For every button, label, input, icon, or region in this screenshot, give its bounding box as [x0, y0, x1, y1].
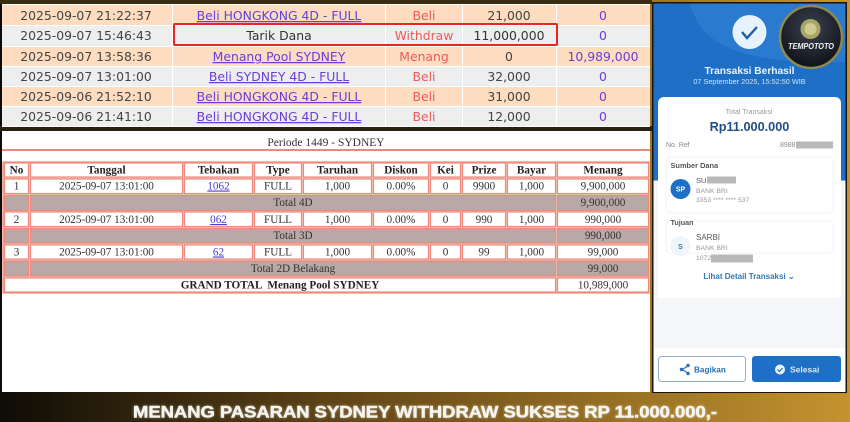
table row 2: 2025-09-07 13:01:00	[59, 214, 154, 226]
table header row: Taruhan	[317, 164, 359, 176]
text: total transaksi: Total Transaksi	[726, 109, 773, 116]
row: 13:58:36: Menang	[399, 49, 449, 64]
panel: bank receipt phone screen	[652, 2, 847, 393]
row: 15:46:43: 11,000,000	[474, 28, 545, 43]
row: 21:41:10: Beli HONGKONG 4D - FULL	[197, 109, 361, 124]
section: sumber dana: SP	[676, 186, 685, 194]
section: sumber dana: Sumber Dana	[670, 161, 719, 170]
table row 3: 0.00%	[387, 246, 415, 258]
section: sumber dana: 3353 **** **** 537	[696, 197, 750, 204]
table row 2: 0.00%	[387, 214, 415, 226]
table grid	[3, 162, 649, 293]
row: 21:52:10: 2025-09-06 21:52:10	[20, 89, 152, 104]
row: 21:52:10	[20, 89, 607, 104]
row: 15:46:43: 2025-09-07 15:46:43	[20, 28, 152, 43]
table header row: Tebakan	[198, 164, 240, 176]
table header row: Type	[266, 164, 290, 176]
table row 1: 2025-09-07 13:01:00	[59, 180, 154, 192]
table row 2: 062	[210, 214, 227, 226]
row: 21:22:37: 0	[599, 8, 607, 23]
table row 1: 9,900,000	[581, 180, 626, 192]
table row 3: 99	[478, 246, 490, 258]
section: tujuan: Tujuan	[670, 218, 694, 227]
table row 2: 990,000	[585, 214, 622, 226]
row: 13:58:36: Menang Pool SYDNEY	[213, 49, 346, 64]
table row 2: 0	[443, 214, 449, 226]
total 4D row: Total 4D	[273, 197, 313, 209]
row: 21:22:37: Beli HONGKONG 4D - FULL	[197, 8, 361, 23]
table row 1: 1	[14, 180, 19, 192]
link: lihat detail: Lihat Detail Transaksi ⌄	[703, 272, 795, 281]
total 3D row	[273, 230, 622, 242]
table row 1: 1,000	[325, 180, 350, 192]
footer bar	[654, 348, 846, 392]
button: selesai: Selesai	[790, 364, 819, 374]
banner caption: MENANG PASARAN SYDNEY WITHDRAW SUKSES RP 11.000.000,-	[133, 402, 717, 422]
row: 21:41:10: 12,000	[487, 109, 531, 124]
table row 1: 0	[443, 180, 449, 192]
text: date: 07 September 2025, 15:52:50 WIB	[693, 77, 806, 86]
row: 21:22:37	[20, 8, 607, 23]
heading: periode: Periode 1449 - SYDNEY	[267, 137, 385, 149]
panel: transaction history table	[2, 4, 650, 127]
table header row: Diskon	[384, 164, 419, 176]
button: bagikan	[658, 356, 746, 382]
section: tujuan: BANK BRI	[696, 245, 728, 252]
row: 21:22:37: Beli	[412, 8, 436, 23]
table row 3: 99,000	[588, 246, 619, 258]
button: bagikan: Bagikan	[694, 366, 726, 374]
table row 3: 0	[443, 246, 449, 258]
text: no ref: No. Ref	[666, 142, 690, 149]
table row 1: 9900	[473, 180, 496, 192]
text: no ref	[666, 142, 833, 149]
icon: success check	[732, 15, 766, 49]
row: 13:58:36: 10,989,000	[568, 49, 639, 64]
logo: tempototo badge	[780, 6, 842, 68]
total 4D row	[273, 197, 626, 209]
banner caption: MENANG PASARAN SYDNEY WITHDRAW SUKSES RP 11.000.000,-	[133, 402, 717, 422]
text: amount: Rp11.000.000	[710, 120, 789, 134]
logo: tempototo badge: TEMPOTOTO	[788, 42, 834, 51]
row: 21:41:10: 2025-09-06 21:41:10	[20, 109, 152, 124]
card: transaction details	[658, 97, 841, 298]
grand total row: 10,989,000	[578, 280, 629, 292]
row: 13:01:00: Beli	[412, 69, 436, 84]
table row 2: 1,000	[325, 214, 350, 226]
total 3D row: Total 3D	[273, 230, 313, 242]
row: 15:46:43: 0	[599, 28, 607, 43]
row: 21:41:10	[20, 109, 607, 124]
section: sumber dana: BANK BRI	[696, 188, 728, 195]
table row 3: 1,000	[325, 246, 350, 258]
total 2D row: Total 2D Belakang	[251, 263, 336, 275]
table row 3: 62	[213, 246, 224, 258]
table header row: Menang	[583, 164, 623, 176]
row: 21:41:10: Beli	[412, 109, 436, 124]
row: 13:58:36: 2025-09-07 13:58:36	[20, 49, 152, 64]
table row 2: 2	[14, 214, 19, 226]
row: 21:52:10: Beli	[412, 89, 436, 104]
table row 1: 0.00%	[387, 180, 415, 192]
total 3D row: 990,000	[585, 230, 622, 242]
row: 21:52:10: Beli HONGKONG 4D - FULL	[197, 89, 361, 104]
row: 15:46:43: Tarik Dana	[245, 28, 312, 43]
table row 1: 1,000	[519, 180, 544, 192]
row: 13:58:36: 0	[505, 49, 513, 64]
panel: periode detail table	[2, 131, 650, 392]
row: 13:01:00: 0	[599, 69, 607, 84]
row: 13:01:00: Beli SYDNEY 4D - FULL	[209, 69, 349, 84]
table header row: Prize	[472, 164, 496, 176]
table row 3: 2025-09-07 13:01:00	[59, 246, 154, 258]
total 2D row	[251, 263, 619, 275]
text: no ref: 8988	[780, 142, 796, 149]
section: tujuan: SARBI	[696, 233, 720, 242]
total 2D row: 99,000	[588, 263, 619, 275]
button: selesai	[752, 356, 841, 382]
row: 15:46:43	[20, 28, 607, 43]
table row 1: FULL	[264, 180, 292, 192]
total 4D row: 9,900,000	[581, 197, 626, 209]
table header row	[10, 164, 623, 176]
section: tujuan: 1072	[696, 255, 711, 262]
heading: transaksi berhasil: Transaksi Berhasil	[704, 66, 795, 77]
table header row: Kei	[437, 164, 454, 176]
table row 2: FULL	[264, 214, 292, 226]
section: tujuan	[666, 218, 833, 262]
row: 21:52:10: 0	[599, 89, 607, 104]
table row 3	[14, 246, 619, 258]
row: 13:01:00	[20, 69, 607, 84]
row: 21:22:37: 2025-09-07 21:22:37	[20, 8, 152, 23]
table header row: Tanggal	[87, 164, 126, 176]
table header row: Bayar	[517, 164, 546, 176]
section: tujuan: S	[678, 244, 683, 251]
table row 2: 1,000	[519, 214, 544, 226]
table row 3: 3	[14, 246, 20, 258]
table row 1: 1062	[207, 180, 230, 192]
grand total row	[181, 280, 629, 292]
row: 13:58:36	[20, 49, 639, 64]
row: 21:41:10: 0	[599, 109, 607, 124]
table row 3: FULL	[264, 246, 292, 258]
table header row: No	[10, 164, 24, 176]
table row 2	[14, 214, 622, 226]
row: 15:46:43: Withdraw	[395, 28, 453, 43]
table row 1	[14, 180, 626, 192]
table row 2: 990	[476, 214, 493, 226]
row: 13:01:00: 32,000	[487, 69, 531, 84]
callout: red highlight around withdrawal	[174, 24, 557, 45]
row: 13:01:00: 2025-09-07 13:01:00	[20, 69, 152, 84]
table row 3: 1,000	[519, 246, 544, 258]
row: 21:22:37: 21,000	[487, 8, 531, 23]
section: sumber dana	[666, 157, 833, 213]
section: sumber dana: SU	[696, 176, 706, 185]
grand total row: GRAND TOTAL Menang Pool SYDNEY	[181, 280, 379, 292]
row: 21:52:10: 31,000	[487, 89, 531, 104]
